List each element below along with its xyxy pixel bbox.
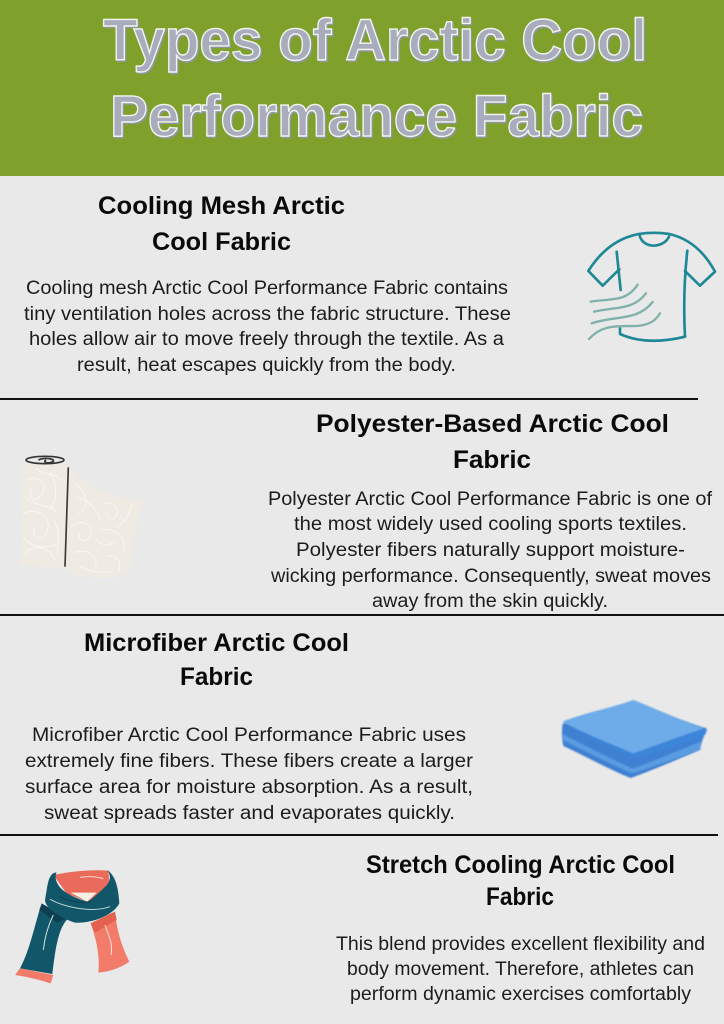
text: polyester description: the most widely used cooling sports textiles. <box>294 514 687 535</box>
text: cooling mesh description: holes allow air to move freely through the textile. As a <box>29 329 504 350</box>
heading: stretch cooling: Fabric <box>486 883 554 911</box>
panel: stretch cooling <box>15 851 705 1005</box>
heading: polyester-based <box>316 410 669 474</box>
text: polyester description: wicking performance. Consequently, sweat moves <box>270 566 711 587</box>
panel: microfiber <box>25 629 707 824</box>
heading: stretch cooling: Stretch Cooling Arctic Cool <box>366 851 675 879</box>
text: cooling mesh description: result, heat escapes quickly from the body. <box>77 355 456 376</box>
title: Types of Arctic Cool <box>103 8 647 73</box>
icon: t-shirt with air waves <box>588 233 715 341</box>
icon: folded blue towels <box>562 700 707 778</box>
title <box>103 8 648 150</box>
text: polyester description: Polyester fibers naturally support moisture- <box>296 540 685 561</box>
text: polyester description: Polyester Arctic Cool Performance Fabric is one of <box>268 489 713 510</box>
title: Performance Fabric <box>110 84 643 149</box>
heading: polyester-based: Fabric <box>453 446 531 474</box>
text: stretch cooling description: This blend provides excellent flexibility and <box>336 934 705 955</box>
text: microfiber description: extremely fine fibers. These fibers create a larger <box>25 751 474 772</box>
text: cooling mesh description: tiny ventilation holes across the fabric structure. These <box>24 304 511 325</box>
text: polyester description: away from the skin quickly. <box>372 591 608 612</box>
heading: stretch cooling <box>366 851 675 911</box>
text: microfiber description: sweat spreads faster and evaporates quickly. <box>44 803 455 824</box>
heading: microfiber <box>84 629 349 691</box>
heading: cooling mesh <box>98 192 345 256</box>
text: cooling mesh description: Cooling mesh Arctic Cool Performance Fabric contains <box>26 278 508 299</box>
heading: cooling mesh: Cooling Mesh Arctic <box>98 192 345 220</box>
panel: polyester-based <box>20 410 713 612</box>
text: stretch cooling description: perform dynamic exercises comfortably <box>350 984 691 1005</box>
text: polyester description <box>268 489 713 612</box>
text: stretch cooling description: body movement. Therefore, athletes can <box>347 959 694 980</box>
heading: microfiber: Microfiber Arctic Cool <box>84 629 349 657</box>
heading: microfiber: Fabric <box>180 663 253 691</box>
title: Performance Fabric <box>111 85 644 150</box>
text: cooling mesh description <box>24 278 511 376</box>
text: microfiber description: surface area for moisture absorption. As a result, <box>25 777 473 798</box>
text: microfiber description: Microfiber Arctic Cool Performance Fabric uses <box>32 725 466 746</box>
heading: cooling mesh: Cool Fabric <box>152 228 291 256</box>
panel: cooling mesh <box>24 192 715 376</box>
heading: polyester-based: Polyester-Based Arctic Cool <box>316 410 669 438</box>
header banner <box>0 0 724 176</box>
icon: fabric roll <box>20 456 144 578</box>
title: Types of Arctic Cool <box>104 9 648 74</box>
icon: scarf <box>15 870 129 983</box>
text: stretch cooling description <box>336 934 705 1005</box>
text: microfiber description <box>25 725 474 824</box>
